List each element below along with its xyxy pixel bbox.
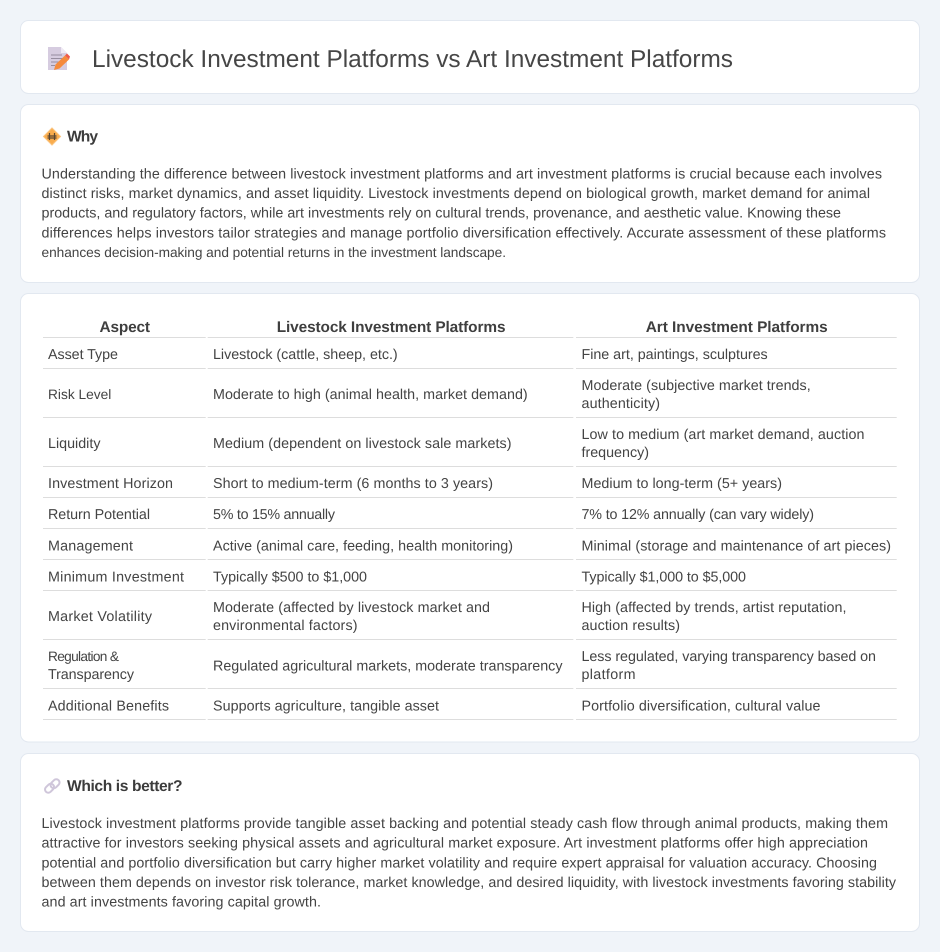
row: market volatility: [43, 600, 897, 640]
row: regulation and transparency: [43, 649, 897, 688]
text block: why paragraph: products, and regulatory factors, while art investments rely on cultural trends, provenance, and aesthetic value. Knowing these: [42, 206, 841, 222]
row: investment horizon: Short to medium-term (6 months to 3 years): [213, 476, 493, 492]
row: management: [43, 538, 897, 560]
row: market volatility: Moderate (affected by livestock market and: [213, 600, 490, 616]
row: asset type: Asset Type: [48, 347, 118, 363]
row: asset type: [43, 347, 897, 368]
row: regulation and transparency: Less regulated, varying transparency based on: [582, 649, 876, 665]
panel: header: [20, 20, 920, 94]
text block: why paragraph: distinct risks, market dynamics, and asset liquidity. Livestock investments depend on biological growth, market demand for animal: [42, 186, 870, 202]
row: return potential: Return Potential: [48, 507, 150, 523]
heading: why: Why: [67, 128, 98, 146]
row: additional benefits: Additional Benefits: [48, 698, 169, 714]
row: asset type: Fine art, paintings, sculptures: [582, 347, 768, 363]
text block: which is better paragraph: Livestock investment platforms provide tangible asset backing and potential steady cash flow through animal products, making them: [42, 816, 888, 832]
icon: diamond sign: [44, 128, 60, 145]
panel: comparison table: [20, 294, 920, 742]
text block: why paragraph: Understanding the difference between livestock investment platforms and art investment platforms is crucial because each involves: [42, 166, 882, 182]
text block: why paragraph: enhances decision-making and potential returns in the investment landscape.: [42, 245, 506, 260]
row: risk level: Moderate to high (animal health, market demand): [213, 387, 528, 403]
row: liquidity: [43, 427, 897, 466]
row: regulation and transparency: Regulation &: [48, 649, 119, 664]
title: Livestock Investment Platforms vs Art Investment Platforms: [92, 46, 733, 73]
row: risk level: [43, 378, 897, 418]
text block: which is better paragraph: attractive for investors seeking physical assets and agricultural market exposure. Art investment platforms offer high appreciation: [42, 836, 868, 852]
row: risk level: authenticity): [582, 396, 660, 412]
row: regulation and transparency: platform: [582, 667, 636, 683]
row: market volatility: High (affected by trends, artist reputation,: [582, 600, 846, 616]
row: risk level: Risk Level: [48, 387, 111, 402]
text block: which is better paragraph: [42, 816, 897, 910]
text block: which is better paragraph: and art investments favoring capital growth.: [42, 894, 321, 910]
row: investment horizon: Medium to long-term (5+ years): [582, 476, 782, 492]
row: investment horizon: Investment Horizon: [48, 476, 173, 492]
row: regulation and transparency: Regulated agricultural markets, moderate transparency: [213, 658, 563, 674]
icon: chain link: [44, 778, 61, 794]
row: additional benefits: Supports agriculture, tangible asset: [213, 698, 439, 714]
row: management: Minimal (storage and maintenance of art pieces): [582, 538, 891, 554]
row: market volatility: Market Volatility: [48, 609, 153, 625]
row: liquidity: Liquidity: [48, 436, 101, 452]
text block: why paragraph: [42, 166, 886, 260]
row: return potential: 5% to 15% annually: [213, 507, 336, 523]
row: asset type: Livestock (cattle, sheep, etc.): [213, 347, 398, 363]
row: regulation and transparency: Transparency: [48, 667, 135, 683]
table header row: [43, 319, 897, 338]
row: return potential: [43, 507, 897, 528]
icon: document with pencil: [48, 47, 70, 70]
table header row: Aspect: [100, 319, 150, 336]
row: additional benefits: [43, 698, 897, 720]
row: additional benefits: Portfolio diversification, cultural value: [582, 698, 821, 714]
text block: why paragraph: differences helps investors tailor strategies and manage portfolio diversification effectively. Accurate assessment of these platforms: [42, 225, 886, 241]
row: market volatility: auction results): [582, 618, 680, 634]
panel: why: [20, 104, 920, 282]
text block: which is better paragraph: potential and portfolio diversification but carry higher market volatility and require expert appraisal for valuation accuracy. Choosing: [42, 855, 877, 871]
table header row: Livestock Investment Platforms: [277, 319, 506, 336]
table header row: Art Investment Platforms: [646, 319, 828, 336]
row: liquidity: Low to medium (art market demand, auction: [582, 427, 865, 443]
row: investment horizon: [43, 476, 897, 498]
text block: which is better paragraph: between them depends on investor risk tolerance, market knowledge, and desired liquidity, with livestock investments favoring stability: [42, 875, 897, 891]
row: minimum investment: [43, 570, 897, 590]
heading: which is better: Which is better?: [67, 778, 182, 795]
row: return potential: 7% to 12% annually (can vary widely): [582, 507, 814, 523]
row: management: Management: [48, 538, 133, 554]
row: liquidity: Medium (dependent on livestock sale markets): [213, 436, 512, 452]
row: minimum investment: Typically $500 to $1,000: [213, 570, 367, 586]
panel: which is better: [20, 754, 920, 932]
row: minimum investment: Minimum Investment: [48, 570, 184, 586]
row: minimum investment: Typically $1,000 to $5,000: [582, 570, 746, 586]
row: management: Active (animal care, feeding, health monitoring): [213, 538, 513, 554]
row: market volatility: environmental factors): [213, 618, 358, 634]
row: liquidity: frequency): [582, 445, 649, 461]
row: risk level: Moderate (subjective market trends,: [582, 378, 811, 394]
